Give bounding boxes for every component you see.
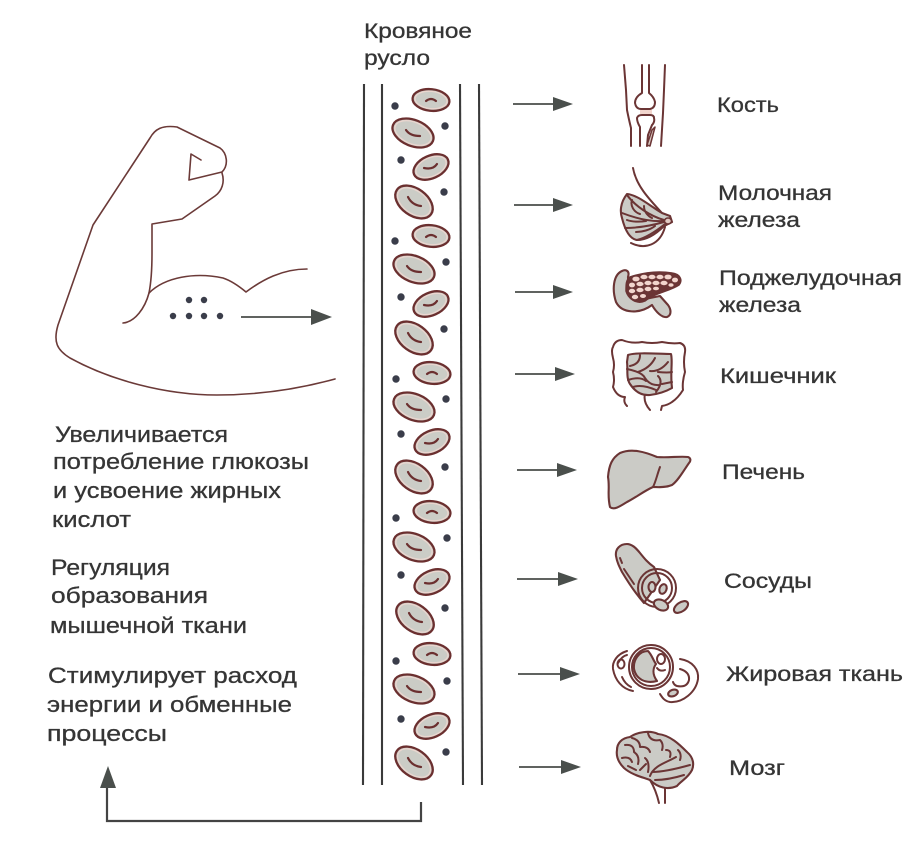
text: muscle formation: мышечной ткани: [50, 613, 247, 638]
heading: bloodstream: русло: [364, 47, 430, 70]
text: energy expenditure: Стимулирует расход: [48, 663, 297, 688]
label: pancreas: [719, 267, 902, 317]
heading: bloodstream: [364, 20, 472, 70]
label: liver: Печень: [722, 461, 805, 484]
text: muscle formation: [50, 555, 247, 638]
text: energy expenditure: процессы: [47, 721, 167, 746]
label: pancreas: железа: [719, 294, 801, 317]
arrow: to brain: [519, 760, 581, 774]
muscle dots: [170, 297, 223, 319]
label: vessels: Сосуды: [724, 570, 812, 593]
arrow: to bone: [513, 97, 573, 111]
text: glucose uptake: Увеличивается: [55, 422, 228, 447]
arrow: to adipose tissue: [518, 667, 580, 681]
icon: brain: [617, 732, 693, 803]
label: bone: Кость: [717, 94, 779, 117]
text: glucose uptake: [52, 422, 309, 532]
text: glucose uptake: и усвоение жирных: [53, 478, 282, 503]
red blood cells: [388, 87, 453, 786]
label: mammary gland: железа: [718, 209, 800, 232]
text: glucose uptake: кислот: [52, 507, 131, 532]
text: muscle formation: Регуляция: [51, 555, 170, 580]
arrow: muscle to bloodstream: [241, 309, 332, 325]
icon: bone: [624, 65, 665, 146]
text: energy expenditure: [47, 663, 297, 746]
icon: pancreas: [614, 270, 681, 317]
text: glucose uptake: потребление глюкозы: [53, 449, 309, 474]
arrow: to mammary gland: [514, 198, 573, 212]
icon: blood vessel cross-section: [616, 544, 690, 615]
small particles: [391, 102, 451, 756]
arrow: to vessels: [517, 572, 578, 586]
icon: flexed arm: [56, 126, 335, 395]
text: muscle formation: образования: [51, 583, 208, 608]
icon: liver: [608, 451, 690, 508]
label: brain: Мозг: [729, 757, 785, 780]
label: mammary gland: [718, 182, 832, 232]
arrow: to pancreas: [515, 285, 573, 299]
label: adipose tissue: Жировая ткань: [726, 663, 903, 686]
text: energy expenditure: энергии и обменные: [47, 692, 292, 717]
arrow: feedback from bloodstream to text: [100, 766, 421, 821]
arrow: to liver: [517, 463, 577, 477]
heading: bloodstream: Кровяное: [364, 20, 472, 43]
icon: adipose tissue: [613, 645, 698, 702]
icon: intestine: [612, 340, 685, 410]
arrow: to intestine: [515, 367, 575, 381]
label: pancreas: Поджелудочная: [719, 267, 902, 290]
label: intestine: Кишечник: [720, 365, 837, 388]
label: mammary gland: Молочная: [718, 182, 832, 205]
blood vessel: [363, 84, 482, 786]
icon: mammary gland: [621, 168, 672, 246]
